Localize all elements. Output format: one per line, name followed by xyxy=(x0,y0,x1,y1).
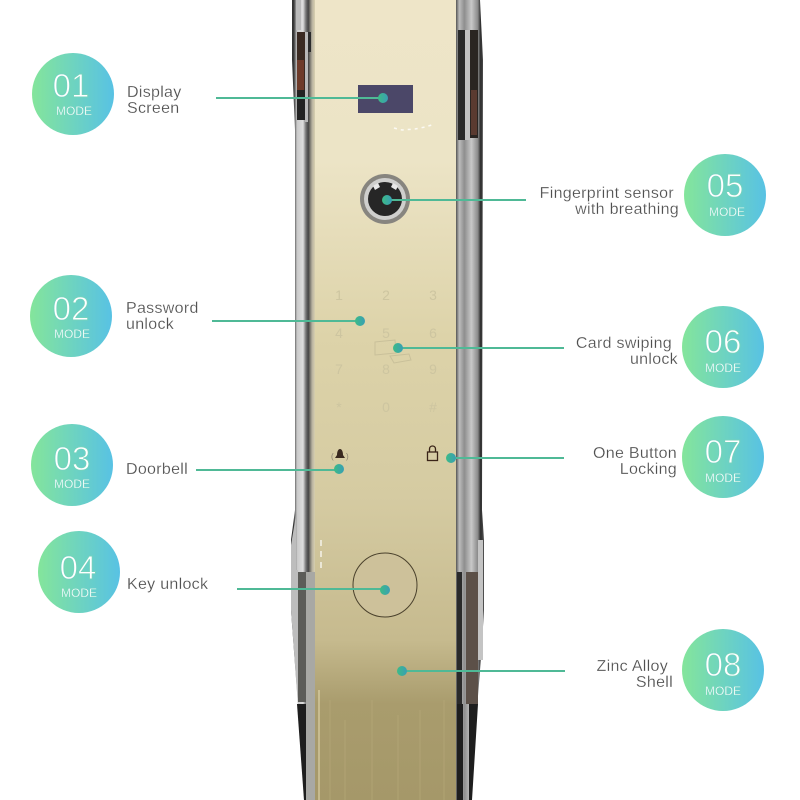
item 03: Doorbell xyxy=(126,461,188,478)
item 08: MODE xyxy=(705,684,741,698)
keypad digits: 9 xyxy=(429,361,437,377)
item 08: Zinc Alloy xyxy=(597,658,668,675)
item 04: Key unlock xyxy=(127,576,209,593)
keypad digits: 1 xyxy=(335,287,343,303)
fingerprint sensor xyxy=(360,174,410,224)
item 02: MODE xyxy=(54,327,90,341)
item 01: Screen xyxy=(127,100,180,117)
item 06: unlock xyxy=(630,351,679,368)
keypad digits: * xyxy=(336,399,342,415)
icon: doorbell: ( xyxy=(331,452,334,461)
keypad digits: 7 xyxy=(335,361,343,377)
keypad digits: # xyxy=(429,399,437,415)
item 05: MODE xyxy=(709,205,745,219)
keypad digits: 2 xyxy=(382,287,390,303)
item 01: Display xyxy=(127,84,182,101)
item 07: MODE xyxy=(705,471,741,485)
key cover xyxy=(353,553,417,617)
item 03 xyxy=(31,424,344,506)
keypad digits: 4 xyxy=(335,325,343,341)
brushed streaks xyxy=(319,124,444,800)
item 08: 08 xyxy=(705,646,741,683)
keypad digits: 8 xyxy=(382,361,390,377)
icon: doorbell: ) xyxy=(346,452,349,461)
item 06 xyxy=(393,306,764,388)
gold front panel xyxy=(315,0,456,800)
item 03: MODE xyxy=(54,477,90,491)
item 05: 05 xyxy=(707,167,743,204)
item 05: Fingerprint sensor xyxy=(540,185,674,202)
keypad digits: 3 xyxy=(429,287,437,303)
item 07 xyxy=(446,416,764,498)
item 02: 02 xyxy=(53,290,89,327)
item 02: unlock xyxy=(126,316,175,333)
keypad digits: 5 xyxy=(382,325,390,341)
item 05 xyxy=(382,154,766,236)
item 02 xyxy=(30,275,365,357)
item 07: One Button xyxy=(593,445,677,462)
keypad digits: 0 xyxy=(382,399,390,415)
icon: padlock xyxy=(428,446,438,460)
item 05: with breathing xyxy=(574,201,679,218)
item 06: 06 xyxy=(705,323,741,360)
lock body: chrome frame xyxy=(291,0,484,800)
item 07: 07 xyxy=(705,433,741,470)
item 01 xyxy=(32,53,388,135)
item 03: 03 xyxy=(54,440,90,477)
item 06: Card swiping xyxy=(576,335,672,352)
icon: doorbell xyxy=(331,449,349,461)
card icon xyxy=(375,340,411,363)
display screen xyxy=(358,85,413,113)
item 04: 04 xyxy=(60,549,96,586)
item 01: 01 xyxy=(53,67,89,104)
item 01: MODE xyxy=(56,104,92,118)
item 04: MODE xyxy=(61,586,97,600)
keypad digits: 6 xyxy=(429,325,437,341)
item 07: Locking xyxy=(620,461,677,478)
item 06: MODE xyxy=(705,361,741,375)
item 08 xyxy=(397,629,764,711)
item 08: Shell xyxy=(636,674,673,691)
item 04 xyxy=(38,531,390,613)
item 02: Password xyxy=(126,300,199,317)
keypad digits xyxy=(335,287,437,415)
